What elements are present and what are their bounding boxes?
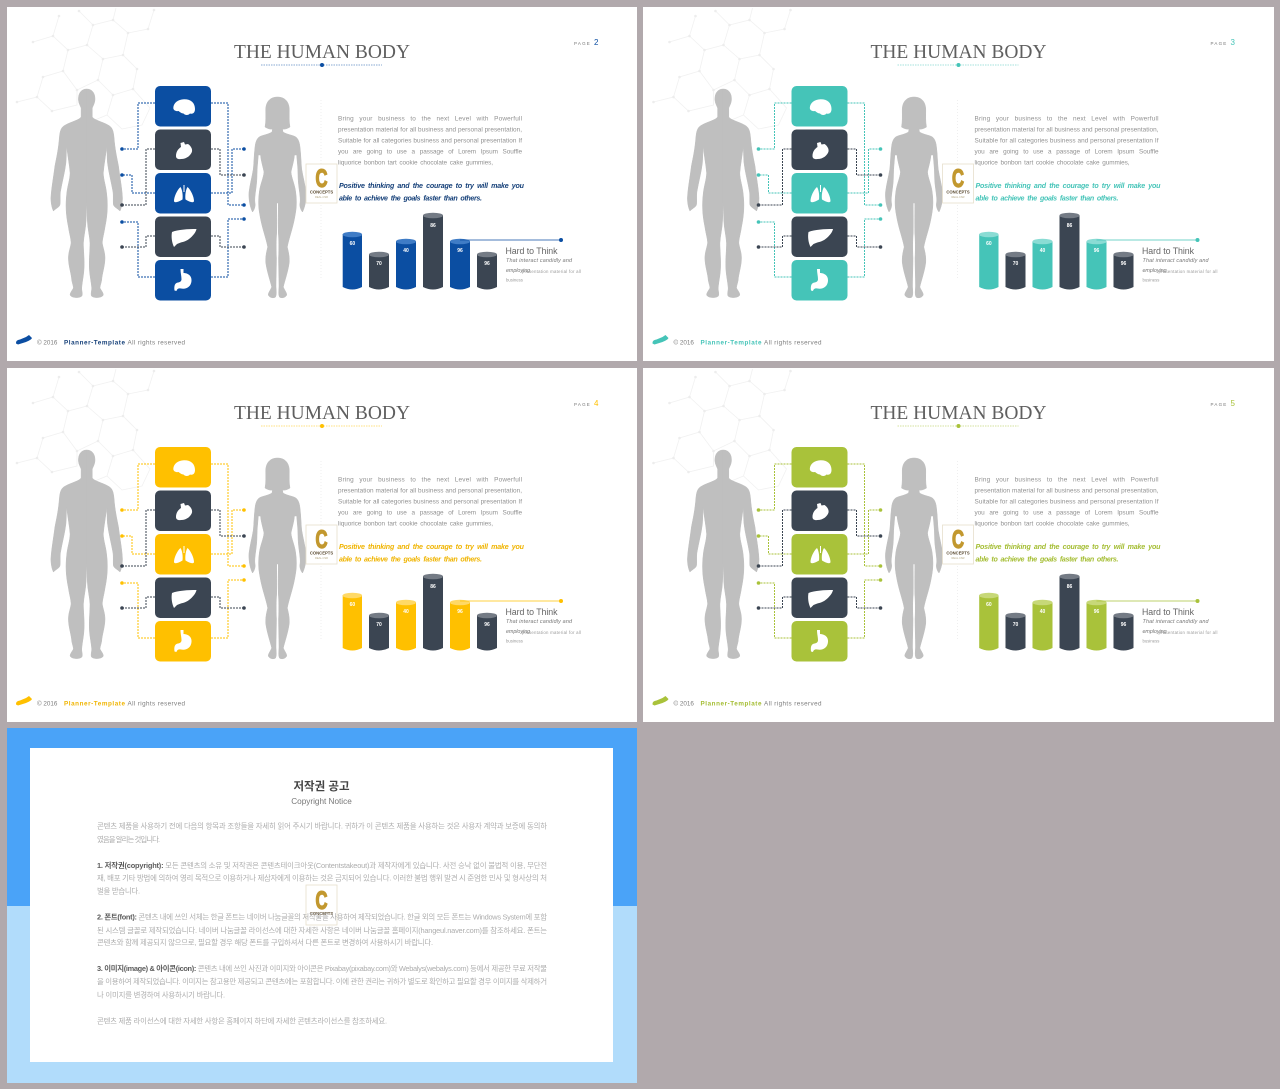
notice section 3: 나 이미지를 변경하여 사용하시기 바랍니다. [97, 990, 225, 1000]
female body silhouette [249, 97, 306, 298]
logo stamp: C [316, 887, 328, 915]
logo stamp: CONCEPTS [310, 911, 333, 916]
callout text: Hard to Think [506, 607, 558, 617]
page number: PAGE 5 [1210, 399, 1235, 408]
notice section 2 [97, 912, 547, 947]
icon box: lungs [155, 534, 211, 574]
italic highlight: Positive thinking and the courage to try will make you [976, 182, 1161, 190]
callout text: business [1142, 278, 1159, 282]
cylinder bar chart: 86 [430, 223, 436, 229]
notice section 2: 2. 폰트(font): 콘텐츠 내에 쓰인 서체는 한글 폰트는 네이버 나눔글꼴의 저작물을 사용하여 제작되었습니다. 한글 외의 모든 폰트는 Windows System에 포함 [97, 912, 547, 922]
italic highlight: Positive thinking and the courage to try will make you [339, 182, 525, 190]
page number: PAGE 3 [1210, 38, 1235, 47]
cylinder bar chart: 40 [1040, 248, 1045, 254]
logo stamp: CONCEPTS [310, 190, 333, 194]
body paragraph: presentation material for all business and personal presentation, [338, 488, 522, 494]
logo stamp: REAL.CSR [315, 195, 328, 199]
body paragraph [974, 116, 1159, 166]
italic highlight: able to achieve the goals faster than others. [339, 556, 482, 564]
logo stamp [306, 525, 337, 564]
logo stamp: CONCEPTS [946, 550, 970, 556]
cylinder bar chart: 60 [350, 602, 355, 608]
slide 2: teal human body page [643, 7, 1274, 361]
notice intro: 였음을 알리는 것입니다. [97, 835, 160, 844]
connector lines [757, 103, 882, 277]
icon box: brain [155, 447, 211, 488]
body paragraph: presentation material for all business and personal presentation, [974, 126, 1159, 134]
title underline [898, 63, 1018, 67]
body paragraph: you are going to use a passage of Lorem Ipsum Souffle [974, 510, 1159, 516]
callout text [506, 246, 581, 282]
notice section 1: 1. 저작권(copyright): 모든 콘텐츠의 소유 및 저작권은 콘텐츠테이크아웃(Contentstakeout)과 제작자에게 있습니다. 사전 승낙 없이 불법적 이용, 무단전 [97, 861, 547, 870]
body paragraph: liquorice bonbon tart cookie chocolate cake gummies, [974, 520, 1130, 528]
italic highlight: able to achieve the goals faster than others. [976, 194, 1119, 202]
callout text: Hard to Think [1142, 246, 1195, 256]
cylinder bar chart: 70 [376, 261, 382, 267]
notice closing line: 콘텐츠 제품 라이선스에 대한 자세한 사항은 홈페이지 하단에 자세한 콘텐츠라이선스를 참조하세요. [97, 1016, 387, 1026]
footer: All rights reserved [128, 700, 185, 708]
logo stamp: REAL.CSR [952, 195, 965, 199]
callout text: Hard to Think [506, 246, 558, 256]
callout text [1142, 246, 1218, 282]
footer: Planner-Template [64, 700, 125, 708]
logo stamp: C [952, 526, 964, 554]
cylinder bar chart: 60 [350, 241, 355, 247]
logo stamp: CONCEPTS [946, 190, 970, 194]
male body silhouette [51, 450, 122, 659]
title: THE HUMAN BODY [870, 402, 1047, 424]
body paragraph: Bring your business to the next Level with Powerfull [338, 116, 522, 122]
italic highlight [339, 182, 525, 202]
callout line [1096, 238, 1200, 242]
title underline [261, 63, 382, 67]
page number: PAGE 4 [574, 399, 599, 408]
title underline [261, 424, 382, 428]
body paragraph: Suitable for all categories business and personal presentation If [974, 138, 1159, 144]
cylinder bar chart: 86 [1067, 584, 1072, 590]
icon box: lungs [792, 534, 848, 574]
icon box: lungs [792, 173, 848, 214]
footer: All rights reserved [764, 700, 822, 708]
cylinder bar chart [343, 213, 497, 290]
logo stamp: REAL.CSR [952, 556, 965, 560]
footer: Planner-Template [700, 700, 762, 708]
footer: © 2016 [674, 700, 694, 708]
callout text: presentation material for all [522, 630, 581, 635]
logo stamp: C [952, 165, 964, 193]
body paragraph: Bring your business to the next Level with Powerfull [338, 476, 522, 484]
connector lines [120, 464, 246, 638]
icon box: stomach [155, 621, 211, 662]
icon box: liver [155, 578, 211, 618]
icon box: brain [792, 447, 848, 488]
logo stamp: C [316, 526, 328, 554]
icon box: stomach [155, 260, 211, 300]
footer: All rights reserved [128, 340, 185, 346]
callout text: employing [506, 629, 530, 635]
callout text: business [1142, 638, 1159, 644]
callout text: Hard to Think [1142, 607, 1195, 617]
cylinder bar chart: 70 [1013, 622, 1018, 628]
cylinder bar chart: 96 [457, 248, 463, 254]
footer: Planner-Template [64, 340, 125, 346]
icon box: heart [155, 490, 211, 531]
cylinder bar chart: 96 [484, 622, 490, 628]
logo stamp: C [316, 165, 328, 193]
female body silhouette [885, 458, 943, 659]
icon box: liver [792, 216, 848, 257]
organ boxes [792, 447, 848, 662]
callout line [1096, 599, 1200, 603]
italic highlight: able to achieve the goals faster than others. [339, 194, 482, 202]
cylinder bar chart: 96 [1121, 261, 1126, 267]
cylinder bar chart: 96 [1121, 622, 1126, 628]
cylinder bar chart: 40 [403, 609, 409, 615]
cylinder bar chart: 96 [1094, 248, 1099, 254]
slide 4: green human body page [643, 368, 1274, 722]
callout text [506, 607, 581, 644]
callout text: employing [506, 268, 530, 274]
icon box: brain [155, 86, 211, 126]
icon box: stomach [792, 621, 848, 662]
icon box: heart [155, 130, 211, 170]
cylinder bar chart: 60 [986, 241, 992, 247]
callout text: employing [1142, 268, 1166, 274]
cylinder bar chart [979, 574, 1134, 650]
connector lines [757, 464, 882, 638]
body paragraph: liquorice bonbon tart cookie chocolate cake gummies, [338, 520, 493, 528]
body paragraph: Suitable for all categories business and personal presentation If [974, 498, 1159, 506]
notice section 1 [97, 861, 547, 896]
cylinder bar chart: 96 [1094, 609, 1099, 615]
footer: All rights reserved [764, 340, 822, 346]
logo stamp [306, 164, 337, 203]
body paragraph [974, 476, 1159, 528]
notice section 3: 3. 이미지(image) & 아이콘(icon): 콘텐츠 내에 쓰인 사진과 이미지와 아이콘은 Pixabay(pixabay.com)와 Webalys(webalys.com) 등에서 제공한 무료 저작물 [97, 964, 547, 973]
body paragraph: you are going to use a passage of Lorem Ipsum Souffle [974, 148, 1159, 156]
notice section 3: 을 이용하여 제작되었습니다. 이미지는 참고용만 제공되고 콘텐츠에는 포함합니다. 이에 관한 권리는 귀하가 별도로 확인하고 필요할 경우 이미지를 삭제하거 [97, 977, 547, 986]
male body silhouette [687, 89, 759, 298]
footer: © 2016 [37, 338, 58, 346]
slide 3: yellow human body page [7, 368, 637, 722]
body paragraph: Suitable for all categories business and personal presentation If [338, 138, 522, 144]
cylinder bar chart: 86 [430, 584, 436, 590]
footer: © 2016 [674, 338, 694, 346]
logo stamp [942, 164, 974, 203]
notice intro: 콘텐츠 제품을 사용하기 전에 다음의 항목과 조항들을 자세히 읽어 주시기 바랍니다. 귀하가 이 콘텐츠 제품을 사용하는 것은 사용자 계약과 보증에 동의하 [97, 822, 547, 830]
body paragraph: Bring your business to the next Level with Powerfull [974, 116, 1158, 122]
cylinder bar chart: 40 [1040, 609, 1045, 615]
cylinder bar chart: 96 [484, 261, 490, 267]
cylinder bar chart: 96 [457, 609, 463, 615]
notice intro [97, 822, 547, 844]
callout text: That interact candidly and [506, 619, 573, 625]
cylinder bar chart: 70 [376, 622, 382, 628]
italic highlight [976, 182, 1161, 202]
cylinder bar chart [343, 574, 497, 650]
organ boxes [155, 447, 211, 662]
cylinder bar chart: 70 [1013, 261, 1018, 267]
body paragraph: liquorice bonbon tart cookie chocolate cake gummies, [338, 160, 493, 166]
callout text: presentation material for all [522, 269, 581, 274]
cylinder bar chart: 60 [986, 602, 992, 608]
female body silhouette [885, 97, 943, 298]
female body silhouette [249, 458, 306, 659]
logo stamp: REAL.CSR [315, 556, 328, 560]
callout text: That interact candidly and [1142, 258, 1210, 264]
title: THE HUMAN BODY [234, 41, 410, 63]
title underline [898, 424, 1018, 428]
footer: © 2016 [37, 700, 58, 708]
body paragraph: you are going to use a passage of Lorem Ipsum Souffle [338, 510, 522, 516]
title: THE HUMAN BODY [234, 402, 410, 424]
page number: PAGE 2 [574, 38, 599, 47]
callout text: That interact candidly and [1142, 619, 1210, 625]
notice section 1: 벌을 받습니다. [97, 886, 140, 896]
body paragraph: Suitable for all categories business and personal presentation If [338, 498, 522, 506]
body paragraph: presentation material for all business and personal presentation, [338, 126, 522, 134]
icon box: liver [792, 578, 848, 618]
icon box: brain [792, 86, 848, 126]
notice section 2: 된 시스템 글꼴로 제작되었습니다. 네이버 나눔글꼴 라이선스에 대한 자세한 사항은 네이버 나눔글꼴 홈페이지(hangeul.naver.com)를 참조하세요. 폰트는 [97, 926, 547, 935]
icon box: stomach [792, 260, 848, 300]
callout text [1142, 607, 1218, 644]
slide 5: copyright notice panel [7, 728, 637, 1083]
copyright heading: 저작권 공고 [293, 779, 350, 793]
icon box: heart [792, 490, 848, 531]
cylinder bar chart [979, 213, 1134, 290]
body paragraph: you are going to use a passage of Lorem Ipsum Souffle [338, 148, 522, 156]
body paragraph [338, 476, 522, 528]
footer [16, 696, 185, 708]
connector lines [120, 103, 246, 277]
callout text: employing [1142, 629, 1166, 635]
italic highlight [339, 543, 525, 564]
organ boxes [155, 86, 211, 300]
callout text: business [506, 638, 523, 644]
callout text: presentation material for all [1158, 630, 1218, 635]
icon box: heart [792, 130, 848, 170]
male body silhouette [51, 89, 122, 298]
italic highlight: Positive thinking and the courage to try will make you [976, 543, 1161, 551]
notice section 1: 재, 배포 기타 방법에 의하여 영리 목적으로 이용하거나 제삼자에게 이용하는 것은 금지되어 있습니다. 이러한 불법 행위 발견 시 준엄한 민사 및 형사상의 처 [97, 874, 547, 882]
footer [652, 335, 822, 346]
icon box: liver [155, 216, 211, 257]
footer: Planner-Template [700, 340, 762, 346]
callout text: That interact candidly and [506, 258, 573, 264]
logo stamp: CONCEPTS [310, 550, 333, 556]
notice section 3 [97, 964, 547, 1000]
italic highlight [976, 543, 1161, 564]
slide 1: blue human body page [7, 7, 637, 361]
callout line [460, 238, 563, 242]
callout text: presentation material for all [1158, 269, 1218, 274]
cylinder bar chart: 40 [403, 248, 409, 254]
logo stamp [306, 885, 337, 925]
organ boxes [792, 86, 848, 300]
callout text: business [506, 278, 523, 282]
copyright subheading: Copyright Notice [291, 797, 352, 806]
cylinder bar chart: 86 [1067, 223, 1072, 229]
body paragraph: presentation material for all business and personal presentation, [974, 488, 1159, 494]
body paragraph [338, 116, 522, 166]
italic highlight: able to achieve the goals faster than others. [976, 556, 1119, 564]
italic highlight: Positive thinking and the courage to try will make you [339, 543, 525, 551]
notice section 2: 콘텐츠와 함께 제공되지 않으므로, 필요할 경우 해당 폰트를 구입하셔서 다른 폰트로 변경하여 사용하시기 바랍니다. [97, 938, 433, 947]
male body silhouette [687, 450, 759, 659]
body paragraph: Bring your business to the next Level with Powerfull [974, 476, 1158, 484]
title: THE HUMAN BODY [870, 41, 1047, 63]
callout line [460, 599, 563, 603]
logo stamp [942, 525, 974, 564]
icon box: lungs [155, 173, 211, 214]
footer [16, 335, 185, 346]
body paragraph: liquorice bonbon tart cookie chocolate cake gummies, [974, 160, 1130, 166]
footer [652, 696, 822, 708]
